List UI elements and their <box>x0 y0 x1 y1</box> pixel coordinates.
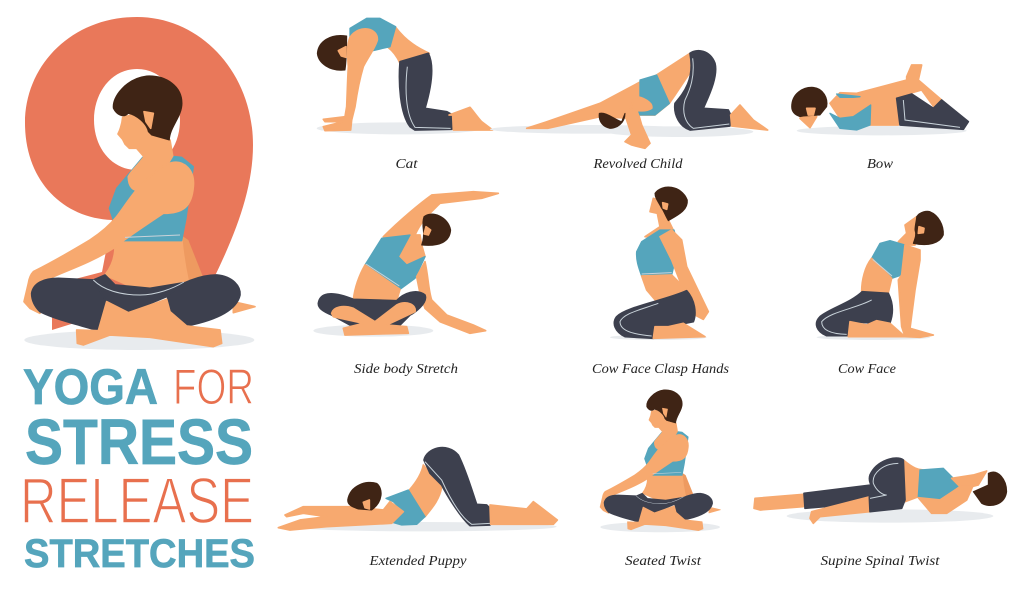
caption: Supine Spinal Twist: Supine Spinal Twist <box>820 553 941 568</box>
title line: YOGA: YOGA <box>23 359 158 415</box>
big number 9 <box>25 17 253 330</box>
caption: Revolved Child: Revolved Child <box>592 156 683 171</box>
caption: Cow Face Clasp Hands: Cow Face Clasp Hands <box>592 361 729 376</box>
title block <box>20 359 255 576</box>
figure: cow face clasp hands <box>610 187 708 340</box>
panel: supine spinal twist pose <box>754 458 1007 568</box>
panel: seated twist pose <box>600 390 720 568</box>
figure: bow <box>792 65 968 135</box>
figure: cow face <box>817 211 943 340</box>
caption: Cat: Cat <box>396 156 419 171</box>
figure: revolved child <box>490 51 768 148</box>
panel: side body stretch pose <box>313 192 498 376</box>
panel: cow face pose <box>817 211 943 376</box>
caption: Seated Twist: Seated Twist <box>625 553 702 568</box>
panel: hero numeral and seated figure <box>24 17 255 350</box>
title line: STRESS: STRESS <box>25 406 253 478</box>
caption: Bow: Bow <box>867 156 893 171</box>
caption: Side body Stretch: Side body Stretch <box>354 361 458 376</box>
figure: supine spinal twist <box>754 458 1007 523</box>
panel: cat pose <box>317 18 493 171</box>
figure: seated twist <box>600 390 720 532</box>
title line: RELEASE: RELEASE <box>20 464 254 537</box>
title line: FOR: FOR <box>173 359 254 415</box>
panel: bow pose <box>792 65 968 171</box>
caption: Extended Puppy: Extended Puppy <box>368 553 467 568</box>
panel: revolved child pose <box>490 51 768 171</box>
title line: STRETCHES: STRETCHES <box>24 532 255 576</box>
caption: Cow Face: Cow Face <box>838 361 896 376</box>
figure: cat <box>317 18 493 134</box>
figure: side body stretch <box>313 192 498 337</box>
figure: extended puppy <box>278 448 557 531</box>
panel: extended puppy pose <box>278 448 557 568</box>
panel: cow face clasp hands pose <box>592 187 729 376</box>
seated twist figure, large <box>24 76 255 350</box>
